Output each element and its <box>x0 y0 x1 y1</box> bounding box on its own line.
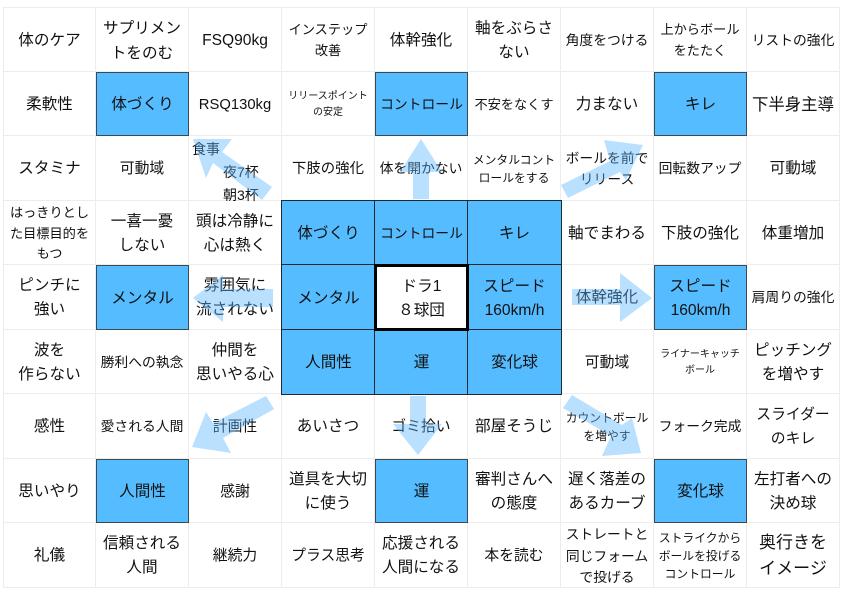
cell: 遅く落差のあるカーブ: あるカーブ <box>568 495 646 512</box>
cell: ライナーキャッチボール: ボール <box>685 365 715 376</box>
cell: 計画性 <box>189 394 282 458</box>
center cell: コントロール: コントロール <box>380 226 463 241</box>
cell: はっきりとした目標目的をもつ <box>3 200 96 265</box>
cell: 左打者への決め球: 決め球 <box>770 495 816 512</box>
center cell: スピード160km/h <box>468 265 561 330</box>
cell: 回転数アップ: 回転数アップ <box>659 161 741 176</box>
goal cell: 運 <box>375 458 468 523</box>
cell: リストの強化 <box>747 7 840 72</box>
cell: 勝利への執念 <box>96 330 189 394</box>
arrow: down-left to 人間性 <box>192 396 274 453</box>
cell: 愛される人間: 愛される人間 <box>101 419 183 434</box>
cell: 審判さんへの態度: の態度 <box>491 495 537 512</box>
cell: メンタルコントロールをする: メンタルコント <box>473 153 555 167</box>
central goal: ドラ1 8球団 <box>375 265 468 330</box>
goal cell: スピード160km/h: スピード <box>669 278 732 295</box>
cell: スライダーのキレ: のキレ <box>771 431 815 447</box>
cell: 本を読む: 本を読む <box>484 548 544 564</box>
cell: 体幹強化 <box>375 7 468 72</box>
cell: 一喜一憂しない <box>96 200 189 265</box>
arrow: left to メンタル <box>193 275 273 322</box>
cell: 体を開かない <box>375 136 468 200</box>
center cell: キレ <box>468 200 561 265</box>
cell: 不安をなくす: 不安をなくす <box>474 96 554 112</box>
cell: 可動域: 可動域 <box>770 160 816 177</box>
cell: 上からボールをたたく: 上からボール <box>660 22 740 37</box>
cell: 軸でまわる: 軸でまわる <box>568 225 646 242</box>
cell: ライナーキャッチボール <box>654 330 747 394</box>
cell: 柔軟性: 柔軟性 <box>26 96 73 113</box>
central goal: ドラ1 8球団: ドラ1 <box>402 278 441 295</box>
cell: あいさつ <box>282 394 375 458</box>
goal cell: スピード160km/h <box>654 265 747 330</box>
cell: スライダーのキレ: スライダー <box>756 407 830 423</box>
goal cell: 変化球 <box>654 458 747 523</box>
cell: ゴミ拾い: ゴミ拾い <box>391 419 451 435</box>
cell: あいさつ: あいさつ <box>297 418 359 435</box>
arrow: up-left to 体づくり <box>193 139 272 200</box>
arrow: up to コントロール <box>400 139 442 199</box>
cell: 雰囲気に流されない <box>189 265 282 330</box>
goal cell: 体づくり <box>96 72 189 136</box>
cell: 感謝: 感謝 <box>220 484 250 500</box>
cell: 角度をつける: 角度をつける <box>566 33 648 48</box>
cell: 下肢の強化: 下肢の強化 <box>292 161 364 177</box>
cell: 体を開かない: 体を開かない <box>380 161 462 176</box>
cell: 継続力 <box>189 523 282 588</box>
cell: 波を作らない: 作らない <box>18 366 81 383</box>
cell: 柔軟性 <box>3 72 96 136</box>
cell: 信頼される人間: 人間 <box>126 559 158 576</box>
cell: 審判さんへの態度 <box>468 458 561 523</box>
cell: 雰囲気に流されない: 流されない <box>196 301 274 318</box>
cell: ストライクからボールを投げるコントロール: コントロール <box>665 567 735 581</box>
cell: 上からボールをたたく: をたたく <box>674 43 726 58</box>
cell: ストレートと同じフォームで投げる: 同じフォーム <box>566 548 648 564</box>
cell: 部屋そうじ: 部屋そうじ <box>475 418 553 435</box>
center cell: 運: 運 <box>414 354 429 371</box>
cell: サプリメントをのむ: トをのむ <box>111 45 173 62</box>
cell: リリースポイントの安定: リリースポイント <box>288 91 368 102</box>
cell: 礼儀: 礼儀 <box>34 547 65 564</box>
center cell: キレ: キレ <box>499 225 530 242</box>
cell: 頭は冷静に心は熱く <box>189 200 282 265</box>
cell: カウントボールを増やす: カウントボール <box>566 411 648 425</box>
cell: 食事 夜7杯 朝3杯: 夜7杯 <box>223 164 259 180</box>
center cell: メンタル: メンタル <box>297 290 360 307</box>
cell: サプリメントをのむ <box>96 7 189 72</box>
goal cell: 運: 運 <box>414 483 429 500</box>
goal cell: スピード160km/h: 160km/h <box>671 302 730 319</box>
cell: 軸をぶらさない: 軸をぶらさ <box>475 20 553 37</box>
arrow: up-right to キレ <box>561 140 643 198</box>
cell: 信頼される人間: 信頼される <box>103 535 181 552</box>
cell: 奥行きをイメージ <box>747 523 840 588</box>
cell: ピンチに強い <box>3 265 96 330</box>
cell: 体幹強化 <box>561 265 654 330</box>
cell: スライダーのキレ <box>747 394 840 458</box>
cell: 遅く落差のあるカーブ: 遅く落差の <box>568 471 646 488</box>
cell: 波を作らない <box>3 330 96 394</box>
cell: 一喜一憂しない: しない <box>119 237 165 254</box>
cell: 肩周りの強化 <box>747 265 840 330</box>
center cell: 体づくり <box>282 200 375 265</box>
cell: ピンチに強い: ピンチに <box>18 277 81 294</box>
cell: 継続力: 継続力 <box>213 548 257 564</box>
arrow: right to スピード <box>572 273 652 322</box>
cell: 愛される人間 <box>96 394 189 458</box>
cell: ゴミ拾い <box>375 394 468 458</box>
goal cell: コントロール <box>375 72 468 136</box>
cell: ボールを前でリリース: リリース <box>580 172 634 187</box>
cell: 体幹強化: 体幹強化 <box>576 289 638 306</box>
cell: 思いやり: 思いやり <box>18 483 81 500</box>
cell: 可動域: 可動域 <box>585 355 629 371</box>
arrow: down to 運 <box>393 396 442 455</box>
goal cell: キレ <box>654 72 747 136</box>
cell: プラス思考 <box>282 523 375 588</box>
cell: 下半身主導 <box>747 72 840 136</box>
arrow: down-right to 変化球 <box>563 395 641 456</box>
cell: 軸をぶらさない <box>468 7 561 72</box>
cell: RSQ130kg <box>189 72 282 136</box>
goal cell: 体づくり: 体づくり <box>111 96 174 113</box>
cell: インステップ改善: インステップ <box>289 22 367 37</box>
cell: 不安をなくす <box>468 72 561 136</box>
cell: 勝利への執念: 勝利への執念 <box>101 355 183 370</box>
goal cell: コントロール: コントロール <box>380 97 463 112</box>
cell: 仲間を思いやる心: 仲間を <box>212 342 258 359</box>
cell: プラス思考: プラス思考 <box>291 548 365 564</box>
central goal: ドラ1 8球団: ８球団 <box>398 302 445 319</box>
cell: 仲間を思いやる心: 思いやる心 <box>196 366 274 383</box>
cell: ライナーキャッチボール: ライナーキャッチ <box>660 349 740 360</box>
cell: カウントボールを増やす: を増やす <box>583 429 631 443</box>
goal cell: キレ: キレ <box>685 96 716 113</box>
center cell: 変化球 <box>468 330 561 394</box>
cell: ピッチングを増やす: を増やす <box>762 366 824 383</box>
goal cell: 人間性 <box>96 458 189 523</box>
cell: 本を読む <box>468 523 561 588</box>
cell: 応援される人間になる <box>375 523 468 588</box>
cell: 力まない: 力まない <box>576 96 638 113</box>
cell: メンタルコントロールをする: ロールをする <box>479 171 549 185</box>
cell: 応援される人間になる: 応援される <box>382 535 460 552</box>
cell: フォーク完成 <box>654 394 747 458</box>
cell: FSQ90kg <box>189 7 282 72</box>
center cell: 変化球: 変化球 <box>491 354 538 371</box>
cell: 一喜一憂しない: 一喜一憂 <box>111 213 173 230</box>
cell: 下肢の強化 <box>654 200 747 265</box>
cell: 回転数アップ <box>654 136 747 200</box>
cell: 頭は冷静に心は熱く: 頭は冷静に <box>196 213 274 230</box>
cell: ストレートと同じフォームで投げる: ストレートと <box>566 527 648 542</box>
cell: ストライクからボールを投げるコントロール <box>654 523 747 588</box>
cell: 奥行きをイメージ: イメージ <box>759 559 827 578</box>
goal cell: 人間性: 人間性 <box>119 483 166 500</box>
cell: 左打者への決め球 <box>747 458 840 523</box>
cell: 波を作らない: 波を <box>34 342 65 359</box>
cell: 力まない <box>561 72 654 136</box>
cell: 審判さんへの態度: 審判さんへ <box>475 471 553 488</box>
cell: 可動域 <box>747 136 840 200</box>
goal cell: 変化球: 変化球 <box>677 483 724 500</box>
cell: 信頼される人間 <box>96 523 189 588</box>
cell: リリースポイントの安定 <box>282 72 375 136</box>
cell: インステップ改善 <box>282 7 375 72</box>
cell: フォーク完成: フォーク完成 <box>659 419 741 434</box>
center cell: スピード160km/h: スピード <box>483 278 546 295</box>
cell: 軸でまわる <box>561 200 654 265</box>
cell: 下肢の強化: 下肢の強化 <box>661 225 739 242</box>
cell: 奥行きをイメージ: 奥行きを <box>759 533 827 552</box>
cell: 体重増加: 体重増加 <box>762 225 824 242</box>
cell: 可動域 <box>561 330 654 394</box>
cell: ストライクからボールを投げるコントロール: ボールを投げる <box>659 549 741 563</box>
cell: 道具を大切に使う: に使う <box>305 495 351 512</box>
cell: 食事 夜7杯 朝3杯: 朝3杯 <box>223 187 259 203</box>
cell: スタミナ: スタミナ <box>18 160 81 177</box>
cell: 食事 夜7杯 朝3杯 <box>189 136 282 200</box>
cell: ピッチングを増やす <box>747 330 840 394</box>
cell: カウントボールを増やす <box>561 394 654 458</box>
cell: インステップ改善: 改善 <box>315 43 341 58</box>
cell: 下半身主導: 下半身主導 <box>752 96 834 114</box>
center cell: コントロール <box>375 200 468 265</box>
cell: ボールを前でリリース <box>561 136 654 200</box>
cell: FSQ90kg: FSQ90kg <box>202 32 268 49</box>
cell: ストレートと同じフォームで投げる <box>561 523 654 588</box>
cell: 軸をぶらさない: ない <box>498 44 530 61</box>
cell: 角度をつける <box>561 7 654 72</box>
cell: ピッチングを増やす: ピッチング <box>754 342 832 359</box>
cell: 体のケア: 体のケア <box>18 32 81 49</box>
cell: 計画性: 計画性 <box>213 419 257 435</box>
cell: 体重増加 <box>747 200 840 265</box>
cell: はっきりとした目標目的をもつ: はっきりとし <box>10 205 89 220</box>
cell: 感性 <box>3 394 96 458</box>
cell: 礼儀 <box>3 523 96 588</box>
cell: はっきりとした目標目的をもつ: もつ <box>37 246 62 261</box>
cell: 可動域 <box>96 136 189 200</box>
cell: 下肢の強化 <box>282 136 375 200</box>
cell: リストの強化: リストの強化 <box>752 33 834 48</box>
cell: サプリメントをのむ: サプリメン <box>103 20 181 37</box>
cell: 感謝 <box>189 458 282 523</box>
goal cell: メンタル <box>96 265 189 330</box>
cell: 体幹強化: 体幹強化 <box>390 32 452 49</box>
center cell: スピード160km/h: 160km/h <box>485 302 544 319</box>
cell: ピンチに強い: 強い <box>34 301 65 318</box>
cell: 肩周りの強化: 肩周りの強化 <box>752 290 834 305</box>
cell: 仲間を思いやる心 <box>189 330 282 394</box>
cell: 雰囲気に流されない: 雰囲気に <box>204 277 266 294</box>
center cell: 運 <box>375 330 468 394</box>
cell: 道具を大切に使う <box>282 458 375 523</box>
cell: 食事 夜7杯 朝3杯: 食事 <box>192 141 220 157</box>
cell: 頭は冷静に心は熱く: 心は熱く <box>204 237 266 254</box>
cell: はっきりとした目標目的をもつ: た目標目的を <box>10 226 89 240</box>
center cell: 人間性: 人間性 <box>305 354 352 371</box>
cell: RSQ130kg: RSQ130kg <box>199 97 271 113</box>
cell: 左打者への決め球: 左打者への <box>754 471 832 488</box>
cell: 思いやり <box>3 458 96 523</box>
cell: 可動域: 可動域 <box>120 161 164 177</box>
cell: 応援される人間になる: 人間になる <box>382 559 460 576</box>
cell: 遅く落差のあるカーブ <box>561 458 654 523</box>
cell: 感性: 感性 <box>34 418 65 435</box>
cell: ボールを前でリリース: ボールを前で <box>566 151 648 166</box>
cell: メンタルコントロールをする <box>468 136 561 200</box>
cell: 道具を大切に使う: 道具を大切 <box>289 471 367 488</box>
center cell: 体づくり: 体づくり <box>297 225 360 242</box>
cell: 部屋そうじ <box>468 394 561 458</box>
cell: 体のケア <box>3 7 96 72</box>
cell: ストライクからボールを投げるコントロール: ストライクから <box>659 531 741 545</box>
cell: スタミナ <box>3 136 96 200</box>
cell: 上からボールをたたく <box>654 7 747 72</box>
center cell: メンタル <box>282 265 375 330</box>
cell: ストレートと同じフォームで投げる: で投げる <box>579 570 635 585</box>
cell: リリースポイントの安定: の安定 <box>313 107 343 118</box>
goal cell: メンタル: メンタル <box>111 290 174 307</box>
center cell: 人間性 <box>282 330 375 394</box>
